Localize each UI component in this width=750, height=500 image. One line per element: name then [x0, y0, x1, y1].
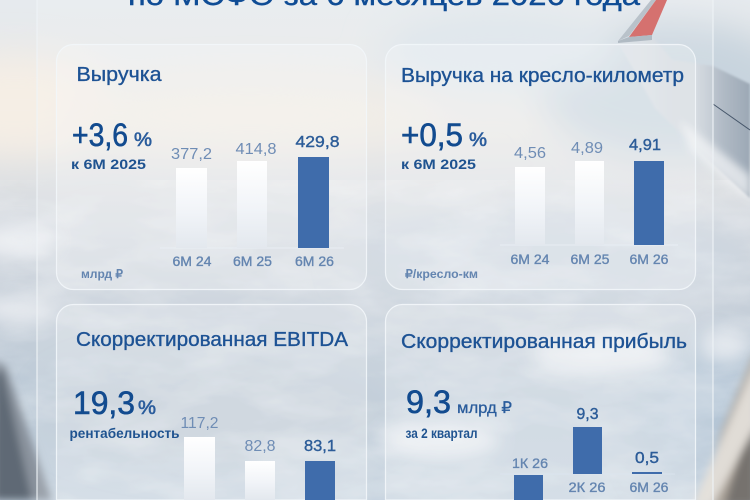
bar chart: 429,8: [296, 134, 340, 151]
bar chart: 414,8: [236, 141, 277, 158]
subtext: к 6М 2025: [401, 156, 476, 172]
big number: 9,3: [406, 384, 451, 420]
big number: [406, 384, 512, 420]
bar chart: 4,56: [514, 145, 546, 162]
bar chart: 4,89: [571, 140, 603, 157]
subtext: к 6М 2025: [71, 156, 146, 172]
big number: +0,5: [401, 117, 463, 153]
bar chart: 82,8: [244, 438, 276, 455]
bar chart: 6М 26: [295, 253, 334, 269]
bar chart: [180, 415, 336, 500]
bar chart: 0,5: [635, 450, 659, 467]
bar chart: 6М 26: [630, 479, 669, 495]
bar chart: 1К 26: [512, 455, 548, 471]
big number: млрд ₽: [457, 400, 512, 417]
big number: +3,6: [72, 117, 128, 153]
subtext: рентабельность: [70, 425, 180, 441]
airplane wing with red winglet: [618, 0, 750, 200]
heading: Выручка на кресло-километр: [401, 65, 684, 87]
unit: ₽/кресло-км: [405, 267, 478, 281]
panel: Скорректированная прибыль: [386, 304, 696, 500]
bar chart: [500, 137, 678, 267]
bar chart: 6М 25: [570, 251, 610, 267]
bar chart: 4,91: [629, 137, 661, 154]
bar chart: 6М 26: [630, 251, 669, 267]
bar chart: [500, 406, 675, 500]
heading: Скорректированная EBITDA: [76, 329, 349, 351]
big number: 19,3: [73, 385, 135, 421]
bar chart: [160, 134, 344, 269]
big number: %: [469, 130, 487, 151]
panel: Скорректированная EBITDA: [56, 304, 366, 500]
window frame bottom right: [692, 350, 750, 500]
bar chart: 6М 24: [172, 253, 212, 269]
panel: Выручка: [56, 44, 366, 290]
window frame bottom left: [0, 360, 52, 500]
unit: млрд ₽: [81, 267, 123, 281]
bar chart: 83,1: [304, 438, 336, 455]
bar chart: 2К 26: [568, 479, 606, 495]
subtext: за 2 квартал: [406, 425, 478, 441]
bar chart: 117,2: [180, 415, 219, 432]
heading: Скорректированная прибыль: [401, 331, 687, 353]
panel: Выручка на кресло-километр: [386, 44, 696, 290]
bar chart: 6М 25: [233, 253, 272, 269]
bar chart: 377,2: [171, 146, 212, 163]
bar chart: 9,3: [576, 406, 599, 423]
big number: %: [134, 130, 152, 151]
bar chart: 6М 24: [510, 251, 550, 267]
heading: Выручка: Выручка: [76, 64, 162, 86]
big number: %: [138, 398, 156, 419]
